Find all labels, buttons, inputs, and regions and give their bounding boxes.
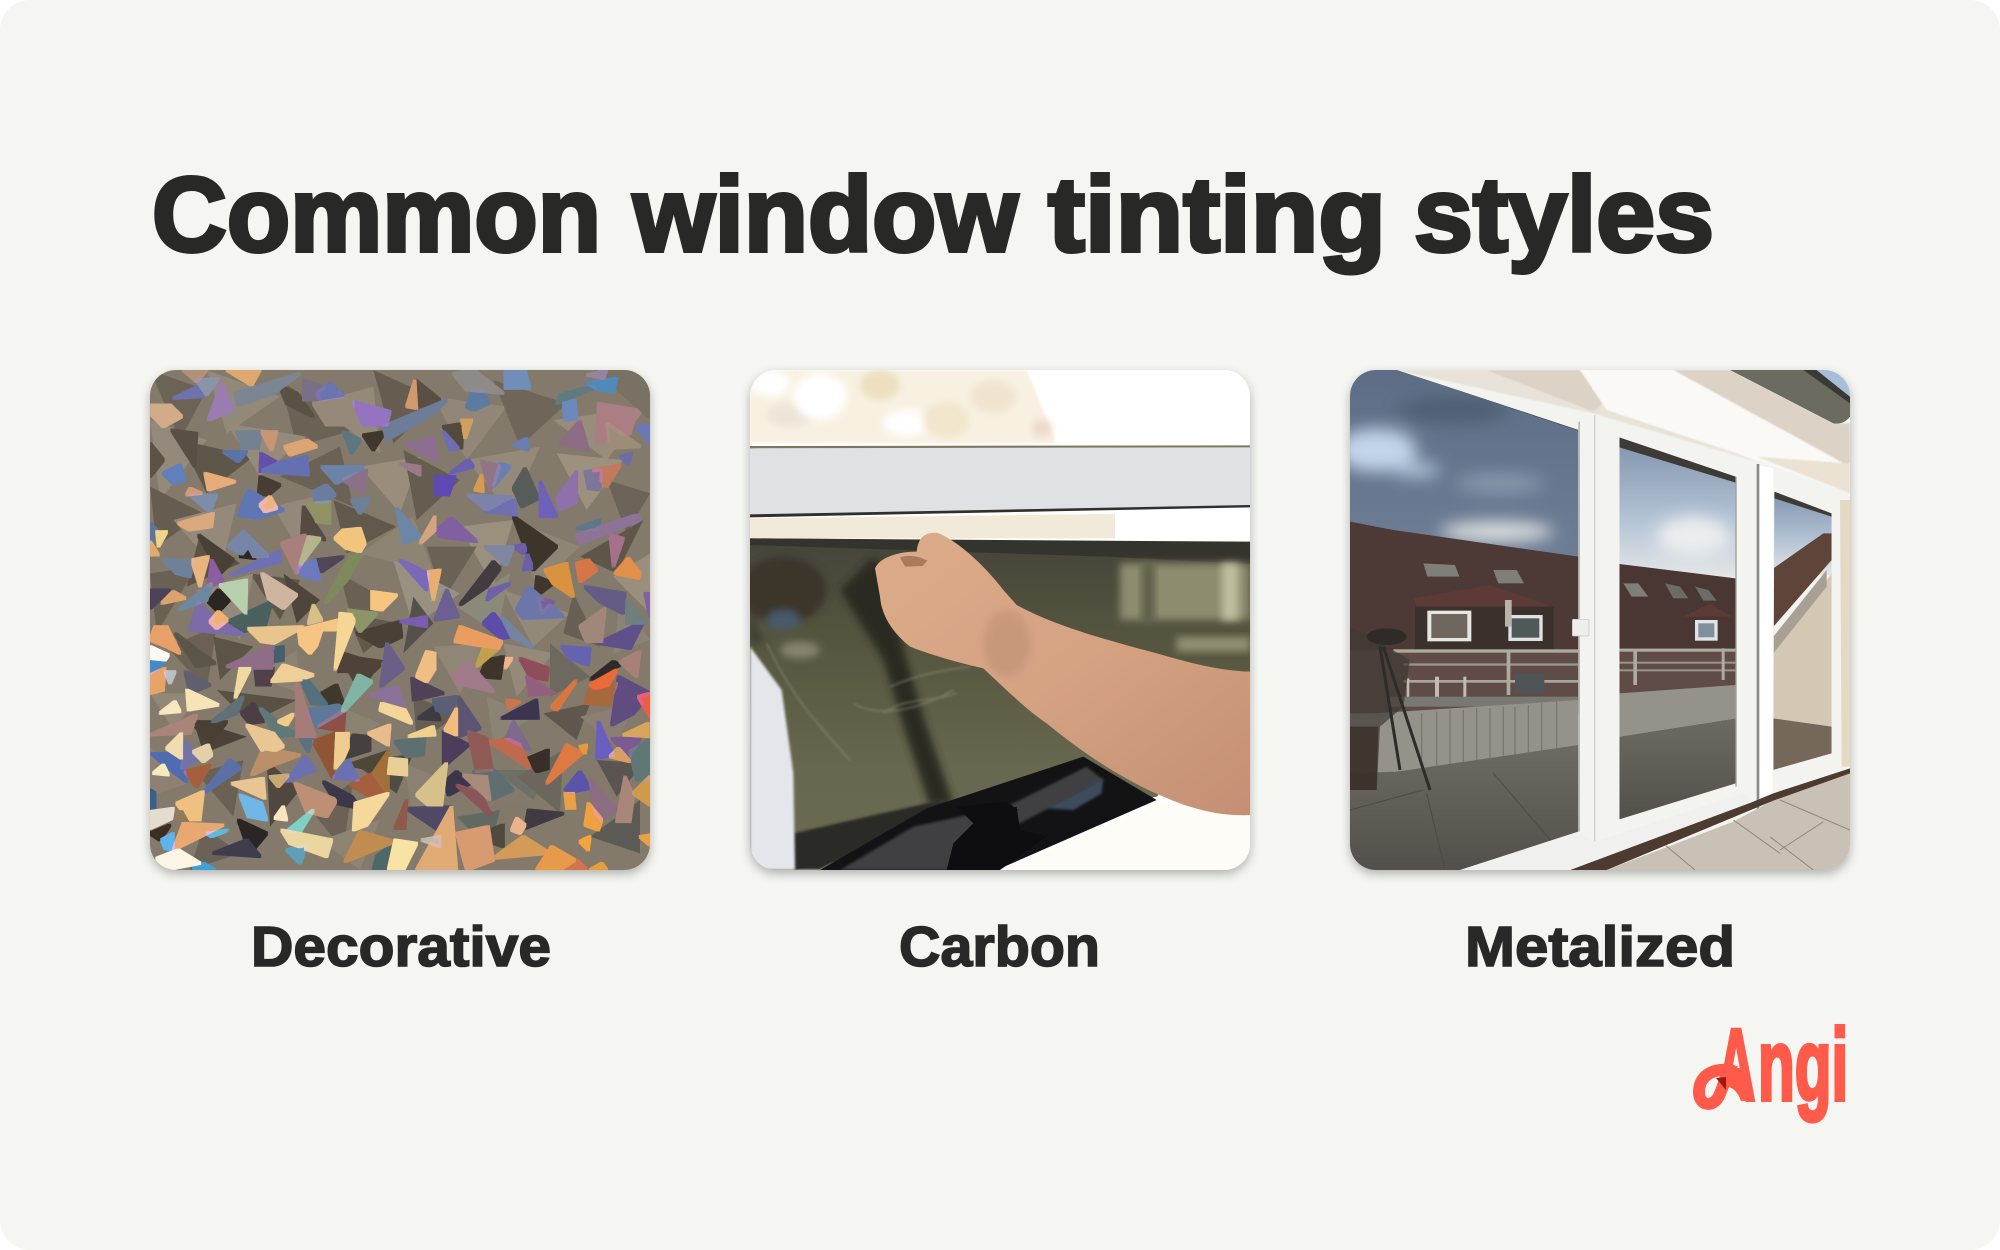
logo: Angi: A: [1717, 1010, 1755, 1123]
logo: Angi: ngi: [1758, 1010, 1848, 1122]
right glass reflection: [1773, 492, 1833, 770]
central door frame shading: [1594, 415, 1595, 842]
tinted glass: [750, 538, 1250, 870]
label: Metalized: Metalized: [1465, 915, 1735, 979]
label: Decorative: Decorative: [251, 915, 551, 979]
arm and fist: [875, 533, 1250, 815]
middle glass reflection: [1619, 437, 1736, 820]
sliding post: [1758, 465, 1773, 815]
roof gutter and corner sky: [1730, 370, 1850, 424]
title: Common: [152, 156, 601, 274]
reflected floor: [1350, 745, 1578, 870]
panel: carbon film photo: [750, 370, 1250, 870]
window frame bar: [750, 447, 1250, 515]
title: styles: [1414, 156, 1714, 274]
white car body: [1000, 802, 1250, 870]
reflection strip: [750, 514, 1115, 538]
door handle: [1572, 619, 1589, 636]
reflected wall panels: [1378, 700, 1578, 772]
faint film scratches: [767, 643, 970, 760]
reflected tree: [740, 557, 953, 807]
title: tinting: [1048, 156, 1386, 274]
reflected house: [1413, 585, 1553, 607]
rolled film: [820, 757, 1157, 870]
reflected roof: [1350, 522, 1578, 660]
person's shirt: [750, 647, 795, 870]
label: Carbon: Carbon: [899, 915, 1100, 979]
logo: Angi: [1693, 1010, 1848, 1124]
panel: decorative film photo: [150, 370, 650, 870]
wall and white frame: [1350, 370, 1850, 870]
dark lower glass edge: [793, 802, 953, 870]
reflected photographer and tripod: [1350, 627, 1410, 790]
terrace paving and threshold: [1607, 773, 1850, 870]
title: [152, 156, 1714, 276]
panel: metalized film photo: [1350, 370, 1850, 870]
reflected balcony: [1350, 650, 1583, 713]
title: window: [632, 156, 1019, 274]
blurred cream background: [750, 370, 1057, 443]
left glass reflection: [1337, 370, 1583, 870]
